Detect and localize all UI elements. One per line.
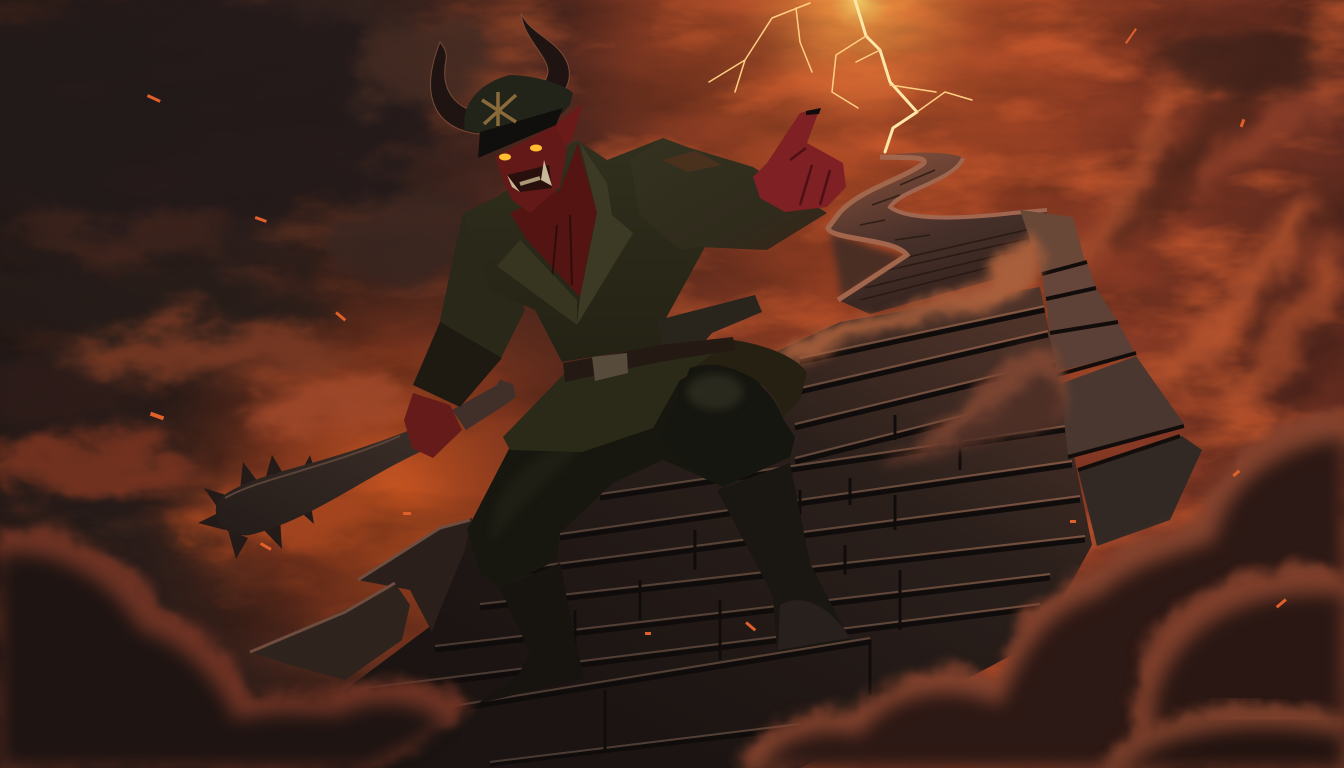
face — [495, 125, 567, 213]
coat skirt — [503, 340, 807, 487]
flying embers — [147, 28, 1287, 635]
step shadows — [432, 308, 1086, 766]
torso coat — [463, 138, 705, 362]
pointing hand — [753, 108, 846, 212]
storm clouds: diagonal bands on the right — [1075, 40, 1330, 400]
far arm and cuff — [413, 213, 525, 407]
foreground clouds: bottom left — [0, 528, 470, 768]
lightning — [709, 0, 972, 152]
ear — [555, 103, 583, 148]
step joints — [574, 415, 962, 749]
lapels — [497, 143, 633, 325]
figure: demon officer — [198, 13, 850, 704]
hand holding mace — [404, 393, 462, 458]
mace — [198, 380, 516, 559]
eyes — [499, 154, 511, 160]
left stone parapet — [250, 518, 472, 680]
outstretched arm — [630, 138, 827, 250]
cap badge — [482, 92, 516, 126]
head — [431, 13, 583, 213]
lit step tops — [330, 306, 1085, 762]
winding stairway in the distance — [828, 153, 1047, 314]
red shirt — [510, 143, 597, 297]
trousers — [467, 367, 795, 588]
rear boot — [477, 563, 584, 704]
main stairs — [320, 287, 1092, 768]
cap — [464, 75, 573, 135]
storm clouds: large masses — [0, 0, 1325, 550]
front boot — [717, 463, 850, 652]
spikes — [198, 455, 316, 559]
teeth — [507, 165, 552, 192]
foreground clouds: bottom right — [735, 412, 1344, 768]
horns — [431, 42, 486, 134]
right stone wall blocks — [1020, 210, 1202, 546]
mist on the stairs — [780, 241, 1063, 465]
belt and sheath — [563, 295, 762, 382]
